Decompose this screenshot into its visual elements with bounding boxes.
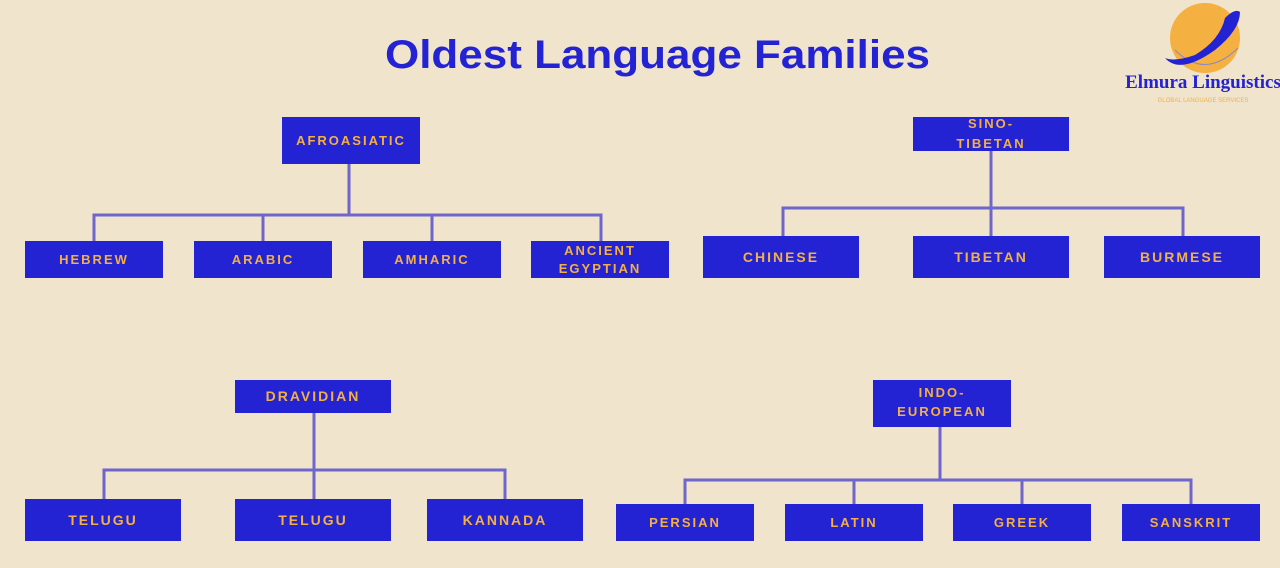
logo: Elmura Linguistics (1125, 72, 1280, 93)
title: Oldest Language Families (385, 33, 930, 77)
tree: afroasiatic (25, 117, 669, 278)
tree: dravidian: KANNADA (463, 512, 547, 528)
tree: afroasiatic: AMHARIC (394, 252, 470, 267)
tree: indo-european: GREEK (994, 515, 1050, 530)
tree: sino-tibetan: BURMESE (1140, 249, 1224, 265)
tree: sino-tibetan (703, 116, 1260, 278)
tree: afroasiatic: AFROASIATIC (296, 133, 406, 148)
tree: sino-tibetan: SINO- (968, 116, 1014, 131)
tree: dravidian: DRAVIDIAN (266, 388, 360, 404)
logo (1125, 3, 1280, 104)
tree: sino-tibetan: CHINESE (743, 249, 819, 265)
tree: dravidian: TELUGU (278, 512, 348, 528)
tree: dravidian (25, 380, 583, 541)
tree: indo-european: EUROPEAN (897, 404, 987, 419)
tree: dravidian: TELUGU (68, 512, 138, 528)
tree: indo-european: SANSKRIT (1150, 515, 1232, 530)
tree: afroasiatic: ARABIC (232, 252, 294, 267)
tree: indo-european: LATIN (830, 515, 878, 530)
tree: indo-european (616, 380, 1260, 541)
tree: sino-tibetan: TIBETAN (956, 136, 1026, 151)
logo: GLOBAL LANGUAGE SERVICES (1158, 98, 1248, 104)
tree: indo-european: PERSIAN (649, 515, 721, 530)
tree: afroasiatic: EGYPTIAN (559, 261, 641, 276)
tree: afroasiatic: HEBREW (59, 252, 129, 267)
tree: sino-tibetan: TIBETAN (954, 249, 1028, 265)
tree: indo-european: INDO- (919, 385, 965, 400)
tree: afroasiatic: ANCIENT (564, 243, 636, 258)
